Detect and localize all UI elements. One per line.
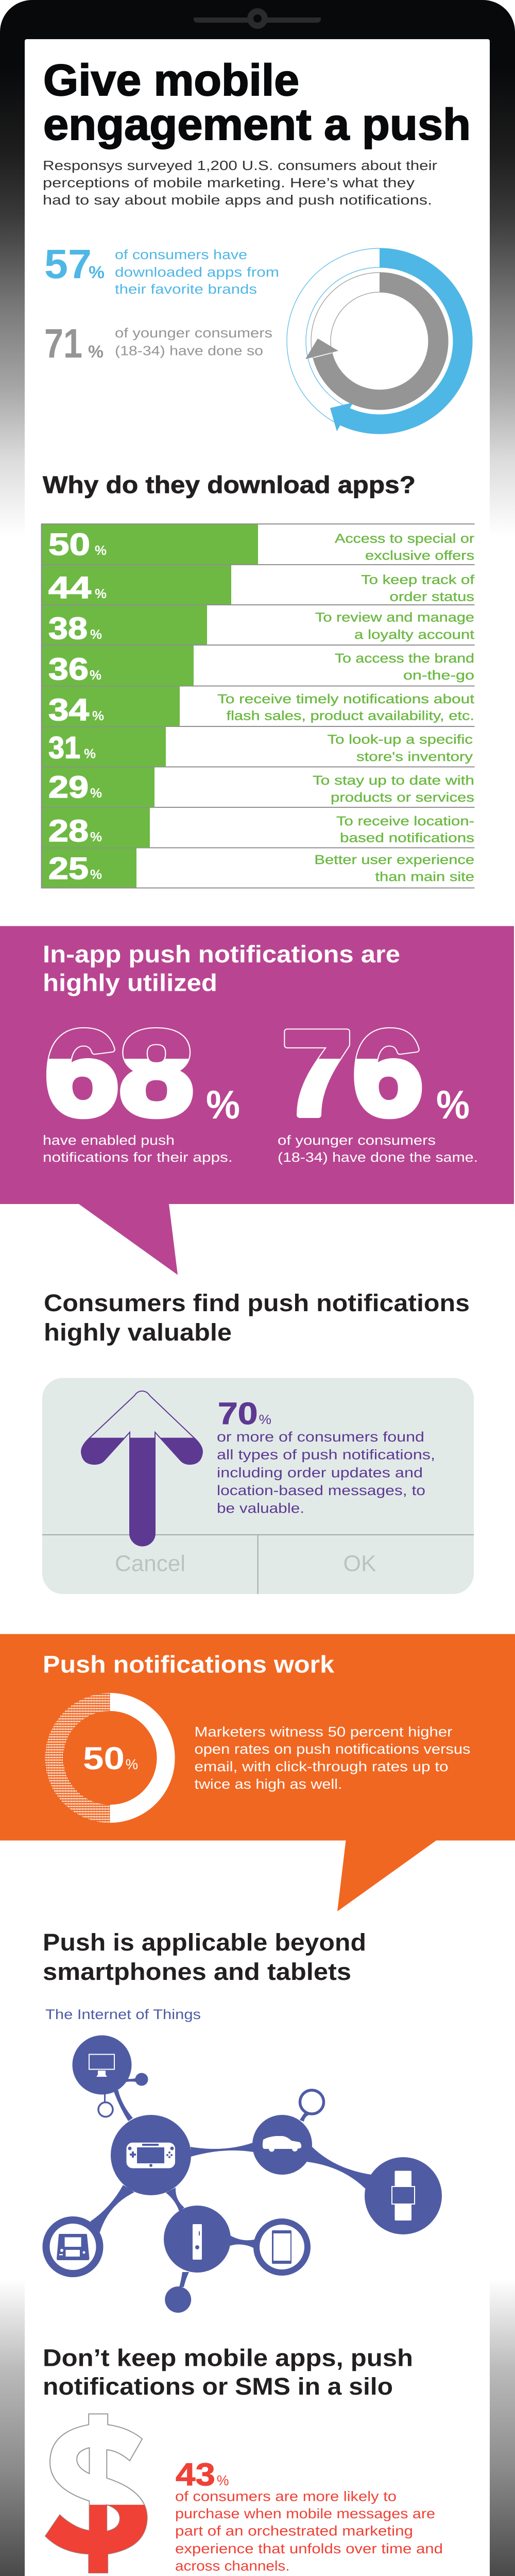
stat: 71%: 71 <box>44 320 82 366</box>
stat: 76%: 76 <box>282 1005 423 1141</box>
bar: 31%: To look-up a specific <box>328 733 473 747</box>
body text: open rates on push notifications versus <box>195 1741 471 1757</box>
body text: twice as high as well. <box>195 1776 342 1792</box>
stat: 43%: % <box>217 2472 229 2488</box>
stat: 71% <box>44 320 272 366</box>
panel heading: In-app push notifications are <box>43 940 400 968</box>
bar: 31%: 31 <box>48 731 80 765</box>
bar: 34%: % <box>92 708 104 723</box>
bar: 50%: exclusive offers <box>365 548 474 563</box>
stat: 43%: experience that unfolds over time and <box>175 2541 443 2556</box>
speech bubble background <box>0 1634 515 1911</box>
bar: 29%: % <box>90 785 102 801</box>
node: game controller <box>111 2115 191 2195</box>
bar: 31%: store's inventory <box>356 750 473 764</box>
stat: 43% <box>175 2457 443 2574</box>
stat: 76%: 76 <box>282 1005 423 1141</box>
bar: 38%: 38 <box>48 611 88 646</box>
bar: 44%: order status <box>389 589 474 604</box>
bar: 29%: To stay up to date with <box>313 773 474 788</box>
bar: 50% <box>42 524 474 564</box>
stat: 43%: of consumers are more likely to <box>175 2488 397 2504</box>
stat: 57%: of consumers have <box>115 247 247 262</box>
bar: 38%: % <box>90 626 102 642</box>
stat: 70%: all types of push notifications, <box>217 1447 435 1463</box>
heading: push is applicable beyond smartphones <box>43 1928 366 1985</box>
node: bottom dot <box>165 2286 191 2313</box>
stat: 70% <box>217 1396 435 1516</box>
stat: 71%: (18-34) have done so <box>115 343 263 359</box>
stat: 68%: 68 <box>45 1005 194 1141</box>
intro text: perceptions of mobile marketing. Here’s what they <box>43 175 415 191</box>
bar: 29%: 29 <box>48 770 89 804</box>
bar: 36%: To access the brand <box>335 651 474 666</box>
heading: don't keep in a silo: Don’t keep mobile apps, push <box>43 2344 413 2371</box>
bar: 44%: 44 <box>48 570 92 605</box>
stat: 57%: % <box>89 263 105 282</box>
stat: 70%: including order updates and <box>217 1465 423 1480</box>
stat: 43%: 43 <box>176 2457 215 2493</box>
bar: 28%: To receive location- <box>336 814 474 828</box>
icon: dollar sign 43% filled <box>45 2414 147 2573</box>
bar: 25%: Better user experience <box>314 853 474 867</box>
bar: 44%: % <box>95 586 107 601</box>
bar chart: reasons for downloading apps <box>41 524 475 888</box>
bar: 38%: To review and manage <box>315 611 474 625</box>
panel heading: Push notifications work <box>43 1651 335 1678</box>
stat: 57%: their favorite brands <box>115 281 257 297</box>
bar: 38% <box>42 605 474 646</box>
stat: 70%: location-based messages, to <box>217 1483 425 1498</box>
heading: consumers find push notifications valuable: highly valuable <box>44 1318 232 1346</box>
bar: 44%: To keep track of <box>361 572 474 587</box>
stat: 43%: across channels. <box>175 2558 289 2574</box>
stat: 68%: notifications for their apps. <box>43 1149 233 1165</box>
title: Give mobile <box>43 56 299 105</box>
node: car <box>252 2090 323 2175</box>
donut chart: 50%: % <box>126 1756 138 1772</box>
bar: 28%: % <box>90 829 102 844</box>
stat: 57%: 57 <box>44 241 92 287</box>
bar: 29%: products or services <box>331 790 474 805</box>
stat: 71%: % <box>88 342 104 362</box>
heading: don't keep in a silo <box>43 2344 413 2400</box>
stat: 43%: purchase when mobile messages are <box>175 2506 435 2521</box>
panel heading <box>43 940 400 996</box>
bar: 29% <box>42 768 474 807</box>
body text: email, with click-through rates up to <box>195 1759 448 1774</box>
stat: 43%: part of an orchestrated marketing <box>175 2523 413 2539</box>
stat: 68%: have enabled push <box>43 1132 175 1148</box>
button: cancel: Cancel <box>115 1551 185 1577</box>
bar: 36%: on-the-go <box>403 668 474 683</box>
bar: 50%: % <box>95 543 107 558</box>
heading: consumers find push notifications valuable: Consumers find push notifications <box>44 1289 470 1316</box>
panel: push notifications work <box>0 1634 515 1911</box>
stat: 70%: 70 <box>218 1396 258 1431</box>
panel heading: highly utilized <box>43 969 217 996</box>
node: small ring <box>98 2103 113 2117</box>
node: monitor <box>72 2035 132 2095</box>
donut chart: 50% <box>45 1693 175 1823</box>
bar: 31%: % <box>84 746 96 761</box>
node: tablet <box>256 2222 307 2273</box>
button: ok: OK <box>343 1551 376 1577</box>
stat: 68% <box>44 1027 239 1164</box>
bar: 34%: flash sales, product availability, etc. <box>227 709 474 723</box>
bar: 25%: 25 <box>48 851 89 886</box>
bar: 28% <box>42 808 474 848</box>
heading: don't keep in a silo: notifications or SMS in a silo <box>43 2372 393 2400</box>
stat: 76% <box>278 1027 477 1164</box>
stat: 70%: or more of consumers found <box>217 1429 424 1445</box>
panel: in-app push notifications <box>0 926 514 1275</box>
bar: 25%: % <box>90 867 102 882</box>
connectors <box>90 2078 371 2287</box>
stat: 71%: of younger consumers <box>115 325 272 341</box>
stat: 76%: % <box>436 1082 470 1127</box>
stat: 57%: downloaded apps from <box>115 264 279 280</box>
stat: 68%: % <box>206 1082 240 1127</box>
bar: 36%: % <box>90 667 101 683</box>
panel: dialog box <box>42 1378 474 1594</box>
donut chart: 50%: 50 <box>83 1741 125 1776</box>
bar: 36% <box>42 646 474 686</box>
bar: 25% <box>42 848 474 887</box>
speaker and camera <box>194 8 321 29</box>
node: watch <box>365 2157 442 2234</box>
stat: 70%: % <box>259 1412 271 1427</box>
stat: 57% <box>44 241 279 297</box>
body text: Marketers witness 50 percent higher <box>195 1724 452 1740</box>
intro text <box>43 158 437 208</box>
intro text: had to say about mobile apps and push notifications. <box>43 192 432 208</box>
heading: push is applicable beyond smartphones: smartphones and tablets <box>43 1958 351 1985</box>
bar: 31% <box>42 727 473 767</box>
heading: push is applicable beyond smartphones: Push is applicable beyond <box>43 1928 366 1956</box>
bar: 50%: 50 <box>48 527 90 562</box>
bar: 38%: a loyalty account <box>354 628 474 642</box>
subheading: internet of things: The Internet of Things <box>45 2007 201 2022</box>
intro text: Responsys surveyed 1,200 U.S. consumers about their <box>43 158 437 173</box>
stat: 76%: (18-34) have done the same. <box>278 1149 478 1165</box>
title <box>43 56 471 149</box>
bar: 28%: based notifications <box>340 831 474 845</box>
title: engagement a push <box>43 100 471 149</box>
stat: 68%: 68 <box>45 1005 194 1141</box>
network diagram: internet of things <box>46 2035 442 2313</box>
body text <box>195 1724 471 1792</box>
bar: 44% <box>42 565 474 605</box>
bar: 36%: 36 <box>48 652 89 686</box>
bar: 34%: To receive timely notifications about <box>217 692 474 706</box>
heading: consumers find push notifications valuable <box>44 1289 470 1346</box>
stat: 76%: of younger consumers <box>278 1132 436 1148</box>
bar: 34%: 34 <box>48 692 90 727</box>
heading: why do they download apps: Why do they download apps? <box>43 471 416 498</box>
bar: 34% <box>42 686 474 727</box>
bar: 50%: Access to special or <box>335 531 474 546</box>
stat: 70%: be valuable. <box>217 1501 304 1516</box>
node: dot <box>135 2073 148 2086</box>
bar: 25%: than main site <box>375 870 474 884</box>
bar: 28%: 28 <box>48 814 89 848</box>
speech bubble background <box>0 926 514 1275</box>
node: game console <box>164 2206 231 2273</box>
node: handheld console <box>46 2220 100 2274</box>
ring chart: 57% and 71% <box>287 248 472 434</box>
icon: up arrow 70% filled <box>81 1391 202 1546</box>
